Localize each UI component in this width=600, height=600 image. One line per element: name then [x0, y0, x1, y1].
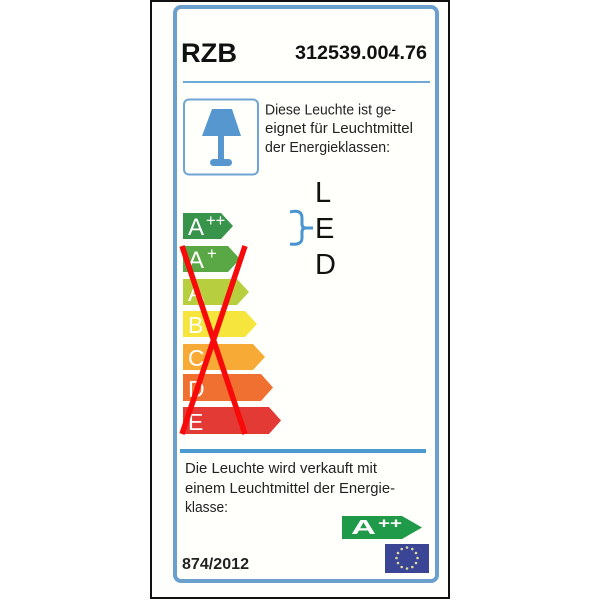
included class arrow A++: ++ [378, 515, 402, 532]
arrow C [183, 344, 265, 371]
suitability text: eignet für Leuchtmittel [265, 120, 413, 137]
arrow A++: A [188, 214, 204, 241]
arrow A++ [183, 212, 233, 241]
arrow C: C [188, 345, 205, 371]
lower divider [180, 449, 426, 453]
LED letters: L [315, 177, 331, 209]
sold-with text: Die Leuchte wird verkauft mit [185, 460, 378, 477]
suitability text: der Energieklassen: [265, 139, 390, 156]
LED letters: E [315, 213, 334, 245]
LED letters [315, 177, 336, 281]
arrow D [183, 374, 273, 402]
arrow A+ [183, 245, 240, 274]
suitability text [265, 102, 413, 156]
outer black frame [151, 1, 449, 598]
arrow A+: A [188, 247, 204, 274]
header divider [183, 81, 430, 83]
arrow B [183, 311, 257, 338]
energy class arrows [183, 212, 281, 435]
arrow D: D [188, 376, 205, 402]
model number: 312539.004.76 [295, 42, 427, 64]
LED letters: D [315, 249, 336, 281]
red cross-out [182, 246, 245, 434]
included class arrow A++: A [351, 517, 376, 539]
arrow A++: ++ [206, 212, 225, 230]
included class arrow A++ [342, 515, 422, 539]
sold-with text [185, 460, 395, 516]
brand heading: RZB [181, 38, 237, 68]
arrow A [183, 279, 249, 307]
sold-with text: einem Leuchtmittel der Energie- [185, 480, 395, 497]
regulation number: 874/2012 [182, 556, 249, 573]
arrow A: A [188, 280, 204, 307]
arrow B: B [188, 312, 203, 338]
arrow E: E [188, 409, 203, 435]
sold-with text: klasse: [185, 499, 228, 516]
brace [290, 211, 313, 244]
suitability text: Diese Leuchte ist ge- [265, 102, 396, 118]
icon: EU flag [385, 544, 429, 573]
icon: table lamp [184, 100, 258, 174]
arrow E [183, 407, 281, 435]
blue label panel [175, 7, 437, 581]
arrow A+: + [207, 245, 217, 263]
